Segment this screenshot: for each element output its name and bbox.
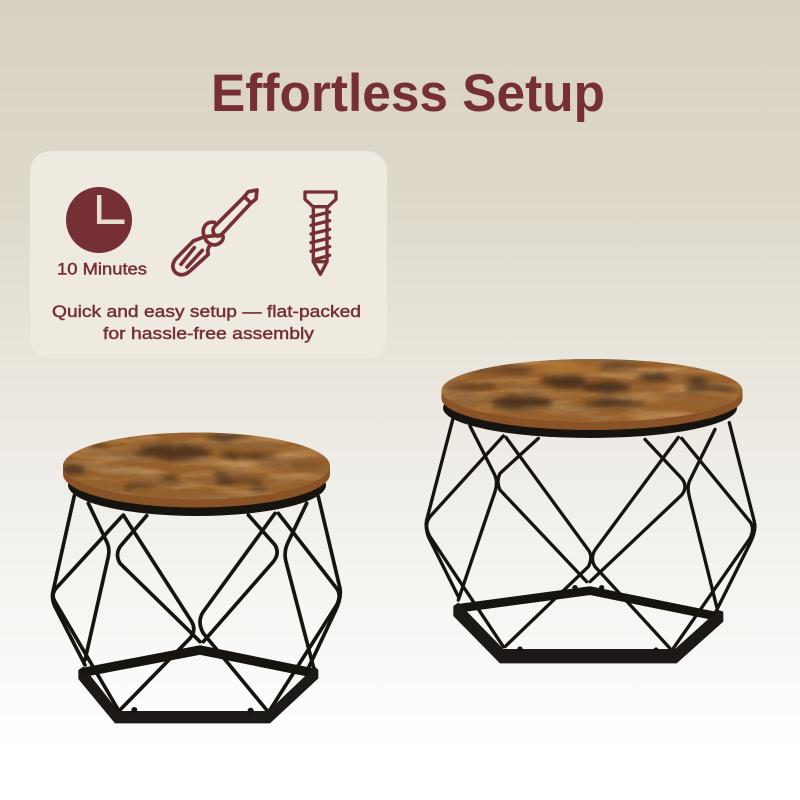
large table: ring under top <box>443 378 737 438</box>
large table: metal frame <box>426 417 755 663</box>
icon: clock <box>66 187 132 253</box>
icon: screw <box>305 192 336 274</box>
large side table <box>426 356 755 663</box>
description text: for hassle-free assembly <box>103 324 315 343</box>
description text <box>52 302 361 343</box>
large table: wood top <box>438 356 746 430</box>
icon: screwdriver <box>173 190 257 275</box>
small side table <box>52 430 340 723</box>
small table: metal frame <box>52 496 340 723</box>
clock label: 10 Minutes: 10 Minutes <box>57 260 147 278</box>
description text: Quick and easy setup — flat-packed <box>52 302 361 321</box>
panel: setup info <box>30 151 387 358</box>
small table: wood top <box>60 430 334 508</box>
title: Effortless Setup <box>211 64 605 123</box>
small table: ring under top <box>68 454 326 516</box>
